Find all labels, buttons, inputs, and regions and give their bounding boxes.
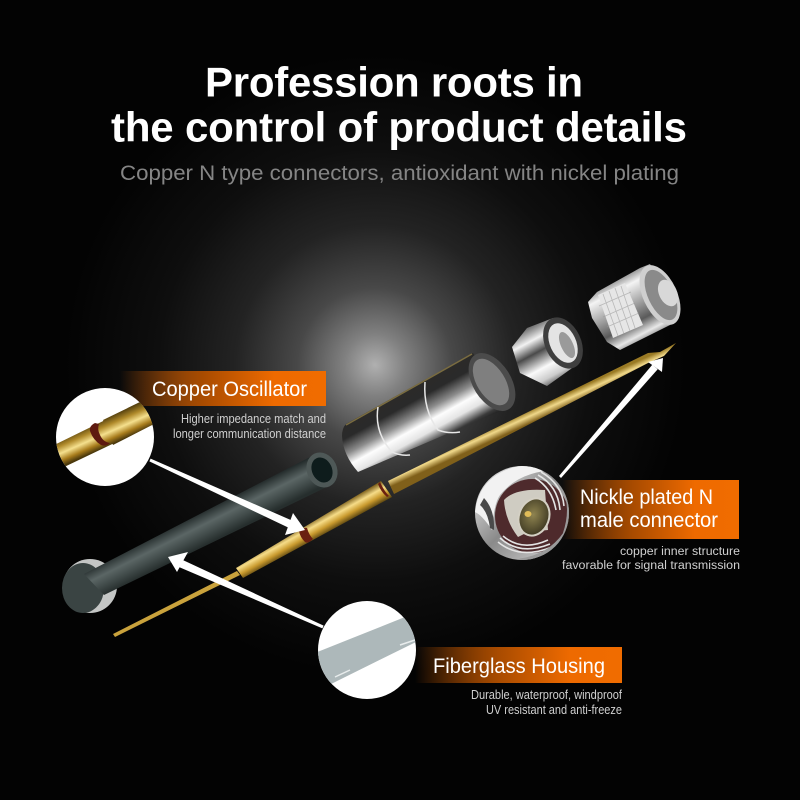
arrow: copper oscillator (149, 459, 305, 535)
label heading: Nickle plated N (580, 485, 713, 509)
label description: Higher impedance match and (181, 412, 326, 426)
gold inner conductor (113, 343, 676, 637)
orange label bar (415, 647, 622, 683)
inset circle: fiberglass tube (315, 601, 420, 699)
label description: UV resistant and anti-freeze (486, 703, 622, 717)
title: Profession roots in (205, 58, 583, 106)
title: the control of product details (111, 104, 687, 150)
inset circle: copper joint (50, 388, 154, 486)
subtitle: Copper N type connectors, antioxidant with nickel plating (120, 162, 679, 185)
label heading: Fiberglass Housing (433, 654, 605, 678)
threaded silver nut (588, 259, 689, 350)
arrow: fiberglass housing (168, 552, 324, 628)
inset circle: connector (475, 464, 570, 562)
silver sleeve (342, 345, 525, 472)
orange label bar (562, 480, 739, 539)
callout: copper oscillator (120, 371, 326, 441)
label heading: Copper Oscillator (152, 377, 307, 401)
arrow: connector (559, 358, 663, 478)
label heading: male connector (580, 508, 718, 532)
callout: fiberglass housing (415, 647, 622, 717)
label description: Durable, waterproof, windproof (471, 688, 622, 702)
callout: nickel plated N male connector (562, 480, 740, 572)
fiberglass tube (62, 447, 343, 613)
orange label bar (120, 371, 326, 406)
label description: longer communication distance (173, 427, 326, 441)
silver ring (512, 311, 591, 386)
label description: favorable for signal transmission (562, 560, 740, 572)
label description: copper inner structure (620, 546, 740, 558)
